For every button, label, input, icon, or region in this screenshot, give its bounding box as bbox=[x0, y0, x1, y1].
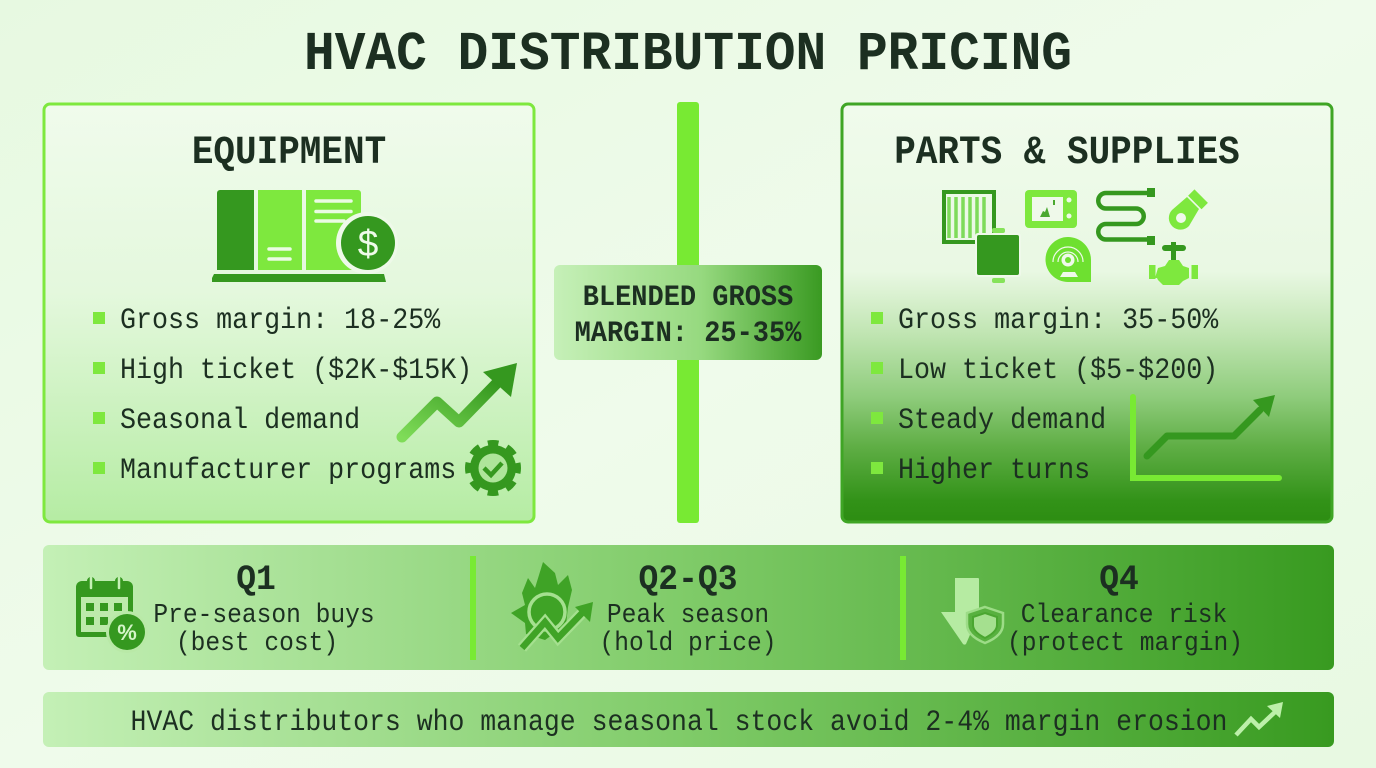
icon: flame with trend arrow bbox=[511, 562, 593, 648]
center divider bar bbox=[677, 102, 699, 523]
list: parts facts bbox=[871, 303, 1219, 487]
icon: valve bbox=[1149, 242, 1198, 285]
list: equipment facts: Manufacturer programs bbox=[120, 453, 456, 487]
divider bbox=[900, 556, 906, 660]
heading: parts and supplies: PARTS & SUPPLIES bbox=[894, 131, 1240, 176]
text: q1: Q1 bbox=[236, 560, 276, 600]
icon: wrench fitting bbox=[1169, 189, 1208, 230]
title: HVAC DISTRIBUTION PRICING bbox=[304, 24, 1072, 86]
icon: down arrow with shield bbox=[941, 578, 1003, 645]
icon: control display bbox=[1025, 190, 1077, 228]
text: q4 bbox=[1007, 560, 1243, 658]
list: equipment facts bbox=[93, 303, 472, 487]
list: parts facts: Gross margin: 35-50% bbox=[898, 303, 1219, 337]
panel: seasonal timeline bbox=[43, 545, 1334, 670]
banner: takeaway: HVAC distributors who manage seasonal stock avoid 2-4% margin erosion bbox=[131, 707, 1227, 739]
list: equipment facts: Seasonal demand bbox=[120, 403, 360, 437]
list: equipment facts: High ticket ($2K-$15K) bbox=[120, 353, 472, 387]
panel: equipment bbox=[44, 104, 534, 522]
text: q4: Clearance risk bbox=[1021, 599, 1227, 630]
icon: gear with check bbox=[468, 443, 518, 493]
list: parts facts: Low ticket ($5-$200) bbox=[898, 353, 1218, 387]
banner: takeaway bbox=[43, 692, 1334, 747]
icon: equipment units with dollar bbox=[212, 190, 398, 282]
icon: equipment units with dollar: $ bbox=[358, 223, 378, 264]
list: equipment facts: Gross margin: 18-25% bbox=[120, 303, 441, 337]
heading: equipment: EQUIPMENT bbox=[192, 131, 386, 176]
icon: coil bbox=[1098, 188, 1155, 245]
list: parts facts: Higher turns bbox=[898, 453, 1090, 487]
panel: parts and supplies bbox=[842, 104, 1332, 522]
list: parts facts: Steady demand bbox=[898, 403, 1106, 437]
text: q4: (protect margin) bbox=[1007, 627, 1243, 658]
text: q2-q3 bbox=[599, 560, 777, 658]
text: q1 bbox=[153, 560, 375, 658]
chart: steady growth line bbox=[1133, 395, 1279, 478]
icon: parts cluster bbox=[944, 188, 1208, 285]
text: q2-q3: (hold price) bbox=[599, 627, 777, 658]
callout: blended gross margin: BLENDED GROSS bbox=[583, 282, 793, 314]
text: q4: Q4 bbox=[1099, 560, 1139, 600]
icon: calendar with percent badge: % bbox=[117, 620, 137, 645]
text: q2-q3: Q2-Q3 bbox=[639, 560, 737, 600]
callout: blended gross margin bbox=[554, 265, 822, 360]
text: q1: (best cost) bbox=[176, 627, 338, 658]
divider bbox=[470, 556, 476, 660]
callout: blended gross margin: MARGIN: 25-35% bbox=[575, 318, 802, 350]
icon: air filter bbox=[944, 192, 1021, 283]
text: q1: Pre-season buys bbox=[153, 599, 375, 630]
icon: calendar with percent badge bbox=[76, 578, 148, 653]
icon: small trend arrow bbox=[1236, 702, 1283, 735]
icon: rising arrow bbox=[402, 363, 517, 437]
icon: blower fan bbox=[1046, 237, 1091, 282]
text: q2-q3: Peak season bbox=[607, 599, 769, 630]
